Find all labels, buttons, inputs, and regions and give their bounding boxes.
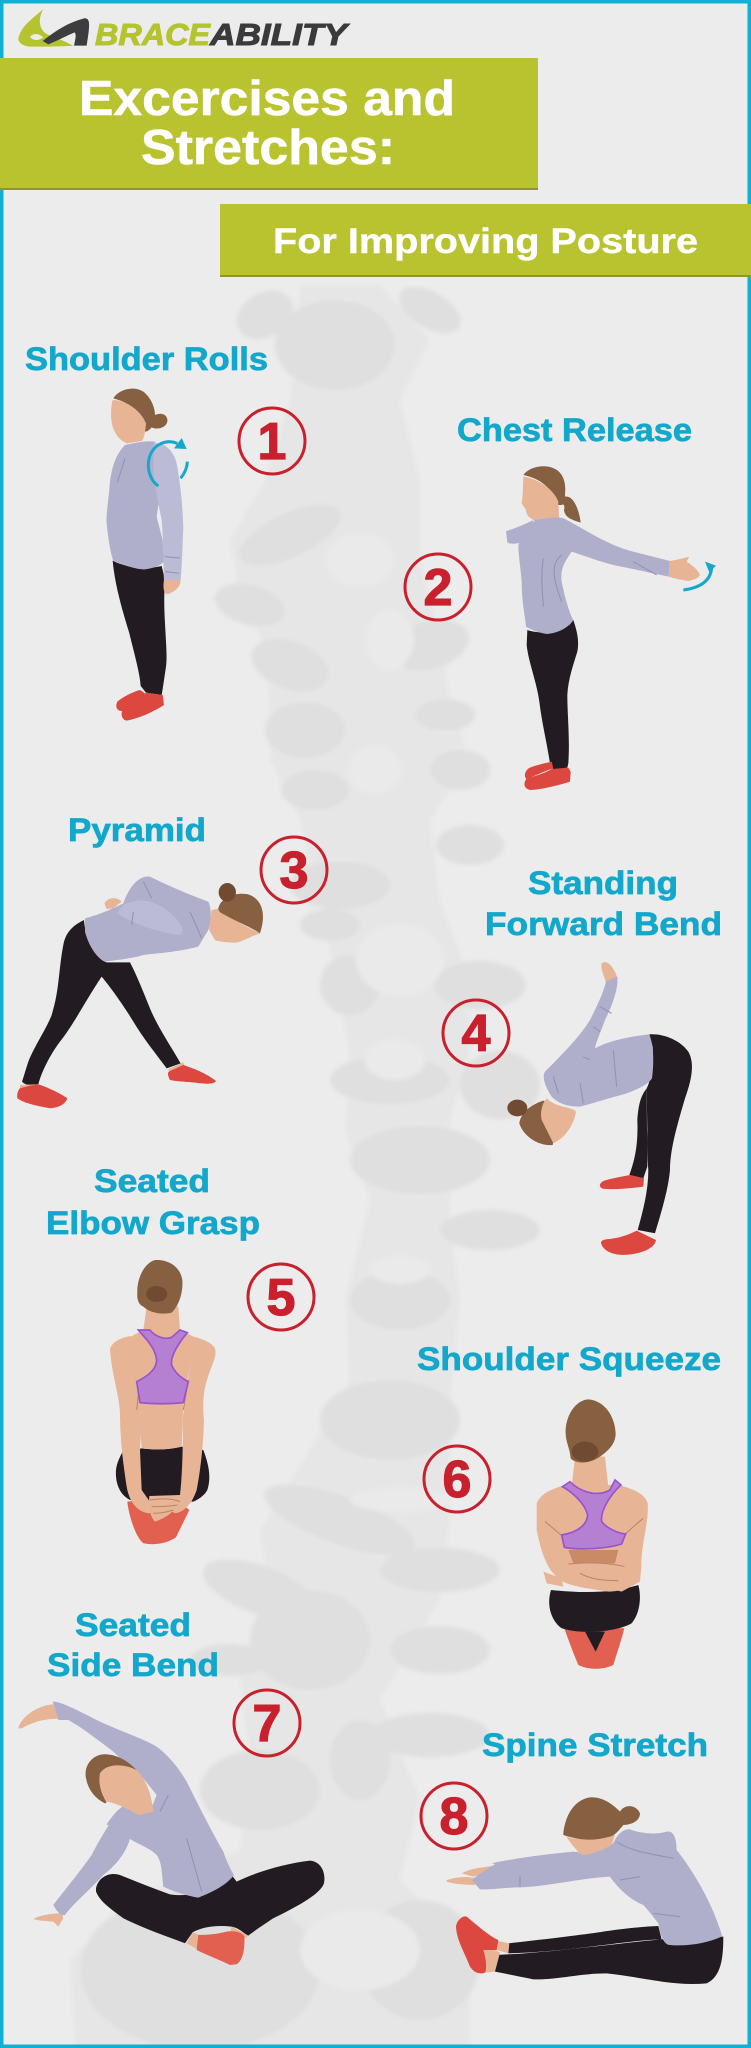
number badge 3: 3 [280, 842, 308, 900]
exercise 7 label [47, 1607, 219, 1683]
subtitle text: For Improving Posture [273, 222, 698, 261]
figure 4: standing forward bend [507, 962, 692, 1255]
exercise 2 label: Chest Release [457, 412, 692, 448]
exercise 7 label: Seated [75, 1607, 191, 1643]
number badge 2: 2 [424, 559, 452, 617]
figure 8: spine stretch [447, 1797, 723, 1984]
logo wordmark: BRACE [95, 17, 211, 52]
exercise 7 label: Side Bend [47, 1647, 219, 1683]
exercise 4 label: Standing [528, 865, 678, 901]
exercise 4 label [485, 865, 722, 942]
figure 2: chest release [506, 466, 716, 790]
rotation arrow [683, 562, 716, 590]
number badge 2 [405, 554, 471, 620]
figure 1: shoulder rolls [106, 389, 187, 721]
logo icon [18, 9, 89, 47]
title text: Excercises and [79, 72, 455, 126]
rotation arrow [148, 438, 187, 486]
figure 3: pyramid [17, 877, 263, 1108]
figure 5: seated elbow grasp [110, 1260, 216, 1544]
exercise 5 label: Seated [94, 1163, 210, 1199]
background spine illustration [70, 277, 540, 2048]
title text: Stretches: [141, 121, 395, 175]
number badge 6 [424, 1446, 490, 1512]
number badge 5 [248, 1264, 314, 1330]
number badge 4: 4 [462, 1005, 491, 1063]
number badge 6: 6 [443, 1451, 471, 1509]
exercise 5 label: Elbow Grasp [46, 1205, 260, 1241]
subtitle banner [220, 204, 751, 277]
exercise 5 label [46, 1163, 260, 1241]
number badge 7 [234, 1690, 300, 1756]
exercise 6 label: Shoulder Squeeze [417, 1341, 721, 1377]
number badge 1: 1 [258, 413, 286, 471]
number badge 3 [261, 837, 327, 903]
figure 6: shoulder squeeze [537, 1399, 648, 1669]
logo: BraceAbility: ABILITY [209, 17, 351, 52]
number badge 8 [421, 1783, 487, 1849]
title text [79, 72, 455, 175]
exercise 8 label: Spine Stretch [482, 1727, 708, 1763]
exercise 4 label: Forward Bend [485, 906, 722, 942]
figure 7: seated side bend [18, 1702, 324, 1965]
exercise 3 label: Pyramid [68, 812, 206, 848]
number badge 5: 5 [267, 1269, 295, 1327]
number badge 4 [443, 1000, 509, 1066]
exercise 1 label: Shoulder Rolls [25, 341, 268, 377]
logo: BraceAbility [18, 9, 351, 52]
title banner [0, 58, 538, 190]
number badge 7: 7 [253, 1695, 281, 1753]
number badge 8: 8 [440, 1788, 468, 1846]
number badge 1 [239, 408, 305, 474]
